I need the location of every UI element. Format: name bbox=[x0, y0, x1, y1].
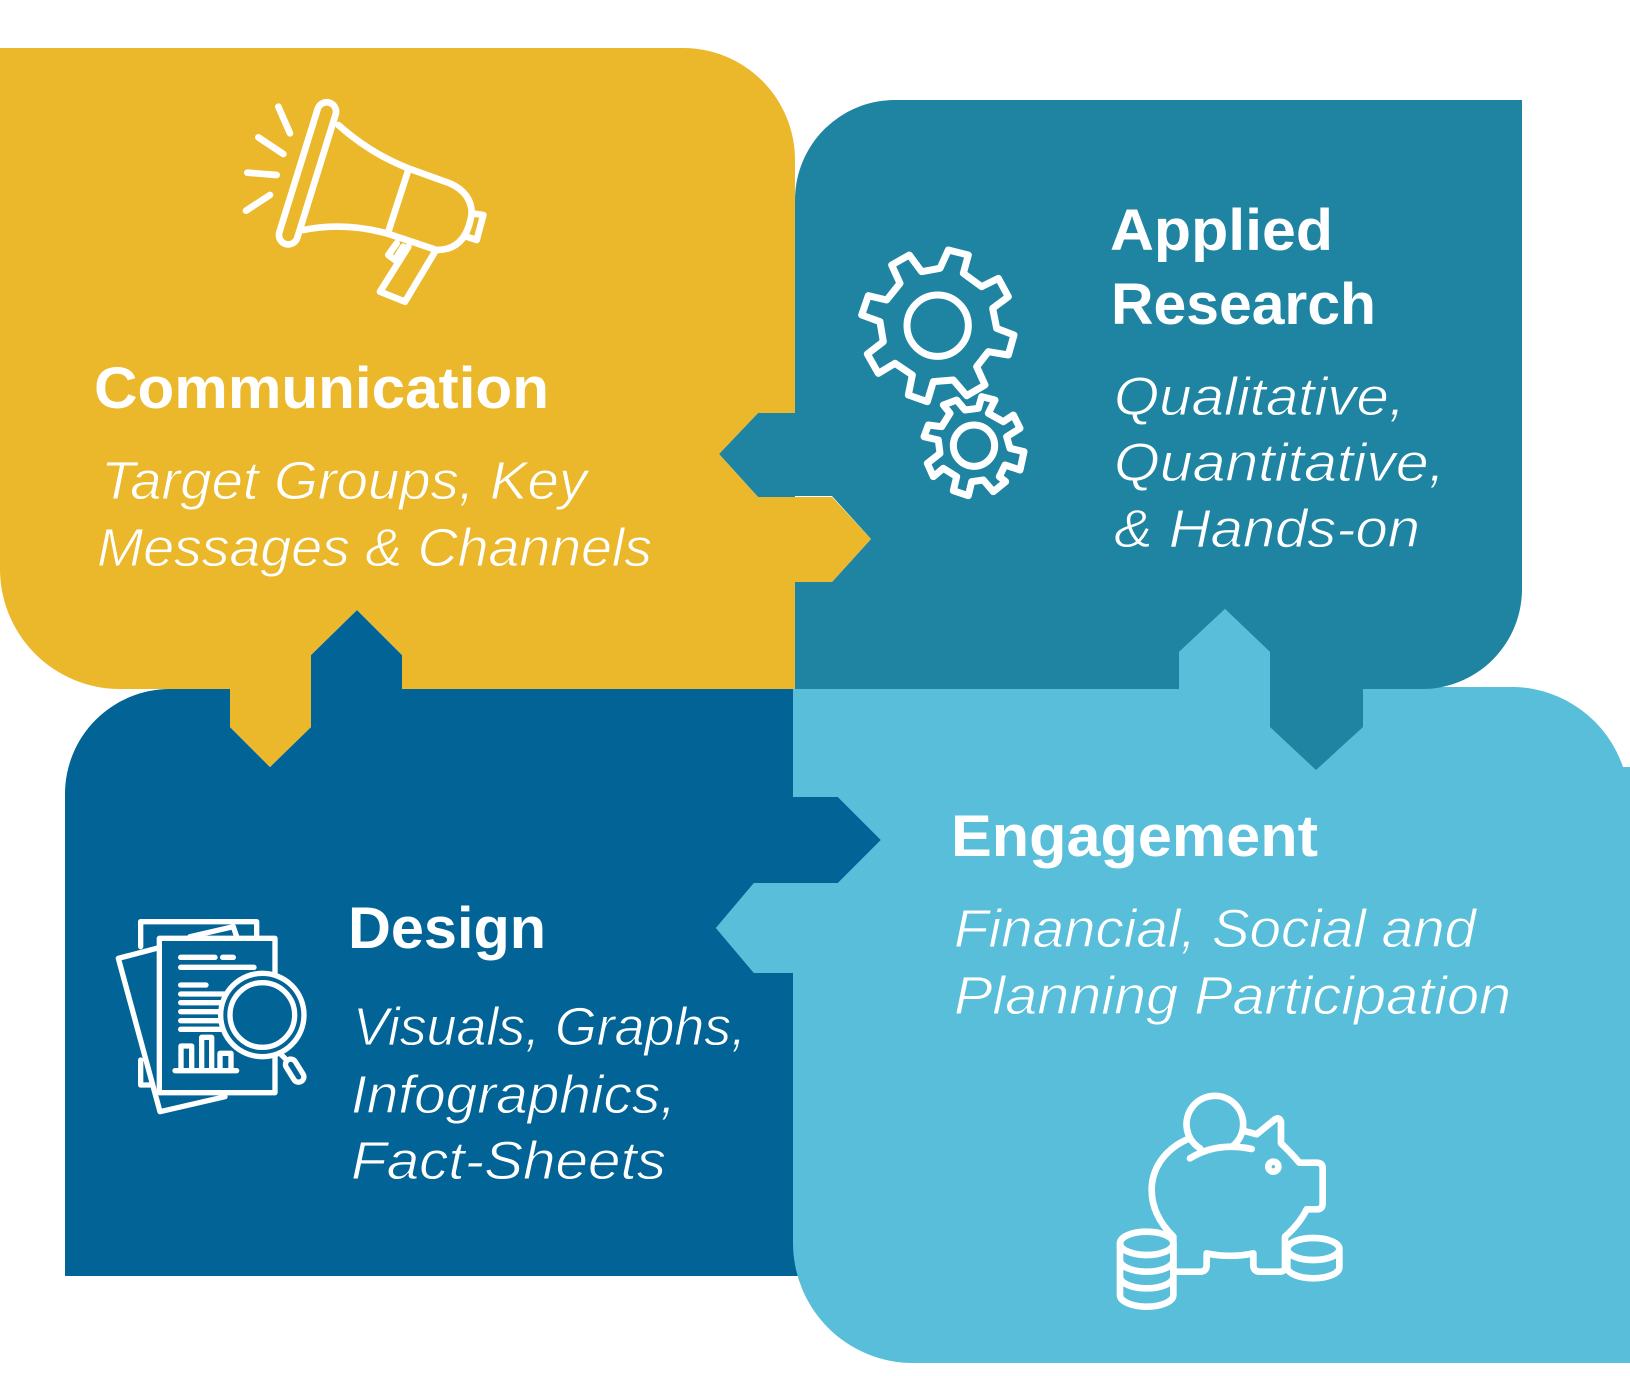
icon: gears bbox=[862, 250, 1024, 496]
heading: applied research: Research bbox=[1111, 272, 1376, 337]
panel: engagement bbox=[716, 609, 1630, 1363]
text: communication details: Messages & Channels bbox=[97, 518, 652, 578]
panel: communication bbox=[0, 48, 871, 767]
text: engagement details: Planning Participation bbox=[954, 966, 1511, 1026]
text: engagement details: Financial, Social and bbox=[954, 899, 1478, 959]
text: design details: Infographics, bbox=[351, 1065, 676, 1125]
text: engagement details bbox=[954, 899, 1511, 1026]
heading: applied research bbox=[1110, 198, 1376, 337]
text: communication details bbox=[97, 451, 652, 578]
heading: applied research: Applied bbox=[1110, 198, 1333, 263]
text: applied research details: Quantitative, bbox=[1114, 433, 1445, 493]
text: design details: Visuals, Graphs, bbox=[353, 997, 746, 1057]
panel: applied research bbox=[719, 100, 1522, 770]
text: applied research details: & Hands-on bbox=[1114, 499, 1420, 559]
icon: megaphone bbox=[246, 102, 483, 302]
heading: design: Design bbox=[348, 896, 546, 961]
panel: design bbox=[65, 610, 881, 1276]
text: design details: Fact-Sheets bbox=[351, 1131, 666, 1191]
text: communication details: Target Groups, Key bbox=[101, 451, 590, 511]
text: applied research details bbox=[1114, 367, 1445, 559]
icon: documents with magnifier bbox=[118, 922, 306, 1112]
icon: piggy bank with coins bbox=[1120, 1096, 1339, 1307]
text: design details bbox=[351, 997, 746, 1191]
text: applied research details: Qualitative, bbox=[1114, 367, 1405, 427]
heading: communication: Communication bbox=[94, 356, 549, 421]
heading: engagement: Engagement bbox=[951, 804, 1318, 869]
